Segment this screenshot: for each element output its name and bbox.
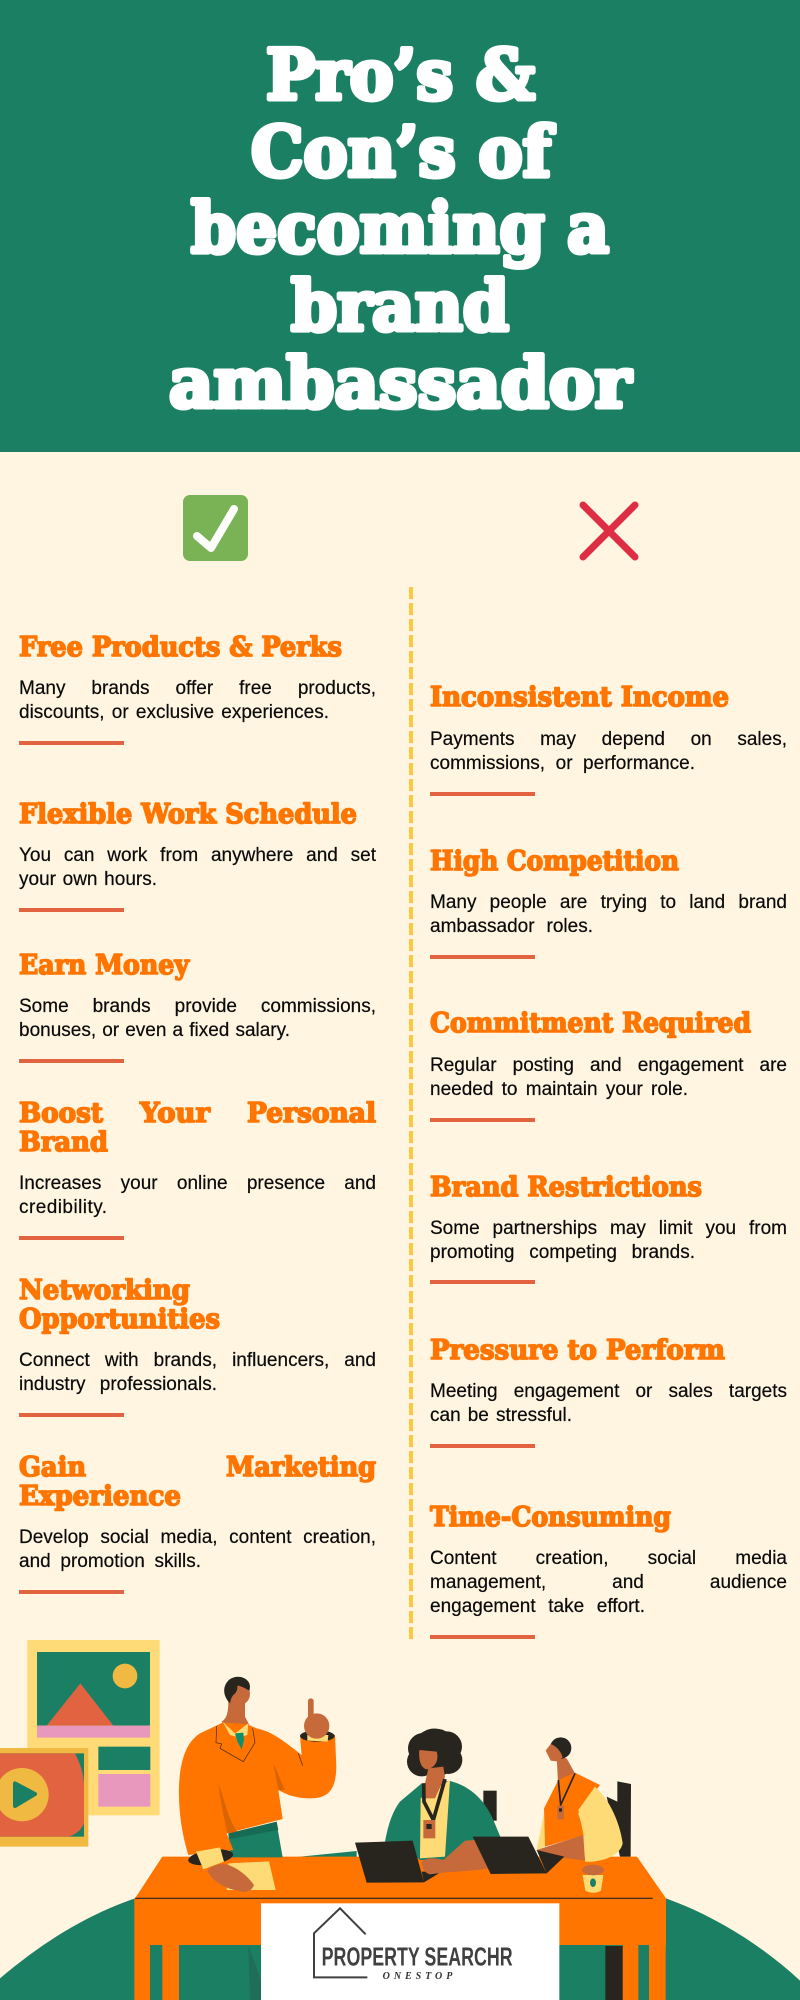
title: brand [291, 266, 509, 347]
description: Meeting engagement or sales targets [430, 1381, 787, 1402]
description [430, 1381, 787, 1426]
rule [19, 1059, 124, 1063]
description [430, 1055, 787, 1100]
heading: Earn Money [19, 950, 190, 981]
heading: Brand [19, 1127, 108, 1158]
title: Con’s of [251, 112, 555, 193]
rule [19, 1236, 124, 1240]
con: Commitment Required [430, 1008, 787, 1122]
description: can be stressful. [430, 1405, 572, 1426]
description: credibility. [19, 1197, 107, 1218]
con: High Competition [430, 846, 787, 959]
pro: Networking Opportunities [19, 1275, 376, 1417]
seated woman with afro and green jacket [385, 1729, 502, 1860]
heading: Time-Consuming [430, 1502, 671, 1533]
description [19, 1350, 376, 1395]
icon: green check box [183, 495, 248, 561]
heading: Boost [19, 1098, 104, 1129]
description: Regular posting and engagement are [430, 1055, 787, 1076]
description [430, 1218, 787, 1263]
rule [19, 1590, 124, 1594]
heading: Networking [19, 1275, 190, 1306]
standing man in orange jacket [179, 1677, 336, 1892]
heading: Your [139, 1098, 211, 1129]
description: promoting competing brands. [430, 1242, 695, 1263]
illustration: office scene [0, 1620, 800, 2000]
heading: Opportunities [19, 1304, 220, 1335]
heading: Inconsistent Income [430, 682, 729, 713]
con: Inconsistent Income [430, 682, 787, 796]
heading: Experience [19, 1481, 181, 1512]
heading [19, 1275, 220, 1335]
description [430, 729, 787, 774]
title: Pro’s & [266, 35, 535, 116]
rule [19, 908, 124, 912]
pro: Free Products & Perks [19, 632, 376, 745]
rule [430, 792, 535, 796]
pro: Boost Your Personal Brand [19, 1098, 376, 1240]
con: Time-Consuming [430, 1502, 788, 1639]
header band [0, 0, 800, 452]
description: You can work from anywhere and set [19, 845, 376, 866]
rule [430, 955, 535, 959]
description [19, 678, 376, 723]
heading: Free Products & Perks [19, 632, 342, 663]
white logo card [261, 1903, 559, 2000]
video player card [0, 1748, 88, 1847]
pro: Earn Money [19, 950, 376, 1063]
rule [19, 741, 124, 745]
con: Brand Restrictions [430, 1172, 787, 1284]
heading [19, 1098, 376, 1158]
description: Many people are trying to land brand [430, 892, 787, 913]
description: Develop social media, content creation, [19, 1527, 376, 1548]
heading: Personal [247, 1098, 376, 1129]
logo: house outline [314, 1908, 367, 1977]
logo: tagline: ONESTOP [383, 1971, 453, 1982]
woman's arm on laptop [422, 1840, 490, 1874]
rule [19, 1413, 124, 1417]
title [169, 35, 634, 424]
green hill background [0, 1851, 800, 2000]
description: Connect with brands, influencers, and [19, 1350, 376, 1371]
rule [430, 1635, 535, 1639]
pro: Gain Marketing Experience [19, 1452, 376, 1594]
rule [430, 1118, 535, 1122]
description: commissions, or performance. [430, 753, 695, 774]
title: ambassador [169, 343, 633, 424]
description: management, and audience [430, 1572, 787, 1593]
description: ambassador roles. [430, 916, 593, 937]
description: Some partnerships may limit you from [430, 1218, 787, 1239]
desk [134, 1857, 666, 2000]
description: Many brands offer free products, [19, 678, 376, 699]
description: engagement take effort. [430, 1596, 645, 1617]
description: bonuses, or even a fixed salary. [19, 1020, 290, 1041]
description: and promotion skills. [19, 1551, 201, 1572]
pro: Flexible Work Schedule [18, 799, 376, 912]
heading: Pressure to Perform [430, 1335, 725, 1366]
description: Some brands provide commissions, [19, 996, 376, 1017]
heading: High Competition [430, 846, 679, 877]
description: industry professionals. [19, 1374, 217, 1395]
poster with landscape picture [27, 1640, 160, 1815]
rule [430, 1280, 535, 1284]
description [19, 996, 376, 1041]
title: becoming a [191, 188, 609, 269]
description [19, 1173, 376, 1218]
description [430, 892, 787, 937]
seated man in orange vest [537, 1737, 631, 1862]
description: discounts, or exclusive experiences. [19, 702, 329, 723]
con: Pressure to Perform [430, 1335, 787, 1448]
heading [19, 1452, 376, 1512]
coffee cup [582, 1865, 604, 1893]
heading: Brand Restrictions [430, 1172, 702, 1203]
description: Payments may depend on sales, [430, 729, 787, 750]
description: your own hours. [19, 869, 157, 890]
dashed column divider [409, 587, 413, 1639]
laptop right [473, 1837, 564, 1874]
description [19, 1527, 376, 1572]
heading: Marketing [226, 1452, 376, 1483]
icon: red cross [580, 502, 638, 560]
heading: Flexible Work Schedule [19, 799, 357, 830]
rule [430, 1444, 535, 1448]
description [18, 845, 376, 890]
description: Content creation, social media [430, 1548, 787, 1569]
description: needed to maintain your role. [430, 1079, 688, 1100]
description [430, 1548, 788, 1617]
description: Increases your online presence and [19, 1173, 376, 1194]
heading: Commitment Required [430, 1008, 751, 1039]
laptop left [355, 1841, 442, 1883]
logo: wordmark: PROPERTY SEARCHR [322, 1943, 513, 1971]
heading: Gain [19, 1452, 86, 1483]
